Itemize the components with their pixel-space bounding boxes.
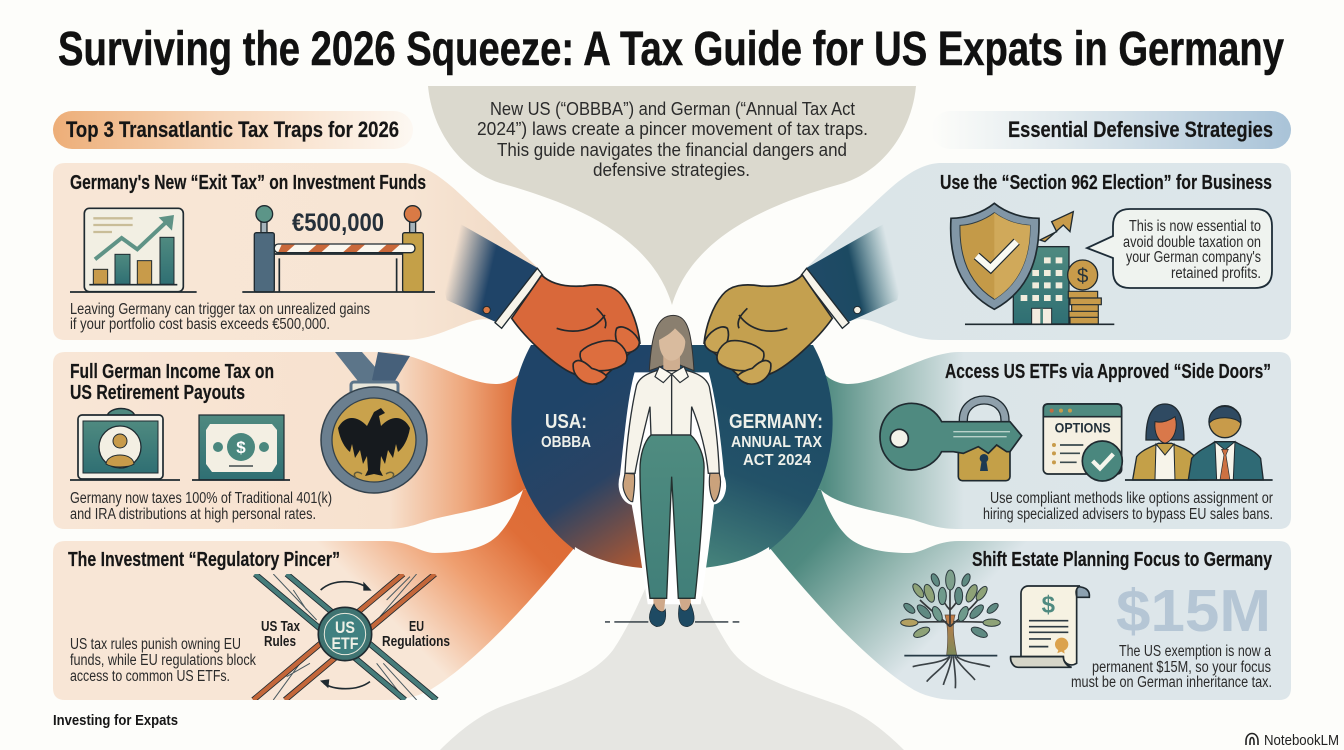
footer: NotebookLM mark: NotebookLM — [1264, 733, 1339, 749]
intro funnel with summary text: defensive strategies. — [593, 160, 750, 180]
right column heading — [931, 111, 1291, 149]
icon: will document scroll: $ — [1042, 592, 1055, 619]
callout bubble: your German company's — [1126, 249, 1261, 266]
diagram: crossed pincer beams around US ETF: EU — [409, 619, 424, 635]
panel: estate planning: permanent $15M, so your focus — [1092, 659, 1271, 676]
icon: growth chart — [70, 208, 197, 292]
panel: side doors: Use compliant methods like options assignment or — [990, 490, 1273, 507]
panel: estate planning: Shift Estate Planning Focus to Germany — [972, 549, 1273, 571]
panel: estate planning: must be on German inheritance tax. — [1071, 674, 1272, 691]
pincer circle: Germany: ANNUAL TAX — [731, 434, 822, 451]
pincer circle: USA: OBBBA — [541, 434, 591, 451]
panel: estate planning — [744, 480, 1291, 700]
footer: source label: Investing for Expats — [53, 712, 178, 729]
icon: dollar banknote: $ — [236, 438, 246, 457]
panel: side doors: hiring specialized advisers to bypass EU sales bans. — [983, 506, 1273, 523]
callout bubble: avoid double taxation on — [1123, 234, 1261, 251]
pincer circle: Germany: ACT 2024 — [743, 452, 811, 469]
left column heading — [53, 111, 413, 149]
icon: key and padlock — [880, 400, 1022, 481]
icon: shield, building and coins — [951, 203, 1114, 324]
intro funnel with summary text: New US (“OBBBA”) and German (“Annual Tax Act — [490, 99, 855, 119]
panel: retirement payouts: and IRA distributions at high personal rates. — [70, 506, 316, 523]
barrier amount: €500,000 — [292, 209, 384, 237]
intro funnel with summary text: This guide navigates the financial dangers and — [497, 140, 847, 160]
icon: €500,000 barrier — [242, 206, 435, 292]
big $15M figure: $15M — [1116, 578, 1271, 644]
panel: retirement payouts: Germany now taxes 100% of Traditional 401(k) — [70, 490, 332, 507]
diagram: crossed pincer beams around US ETF: Regulations — [382, 634, 450, 650]
callout bubble: This is now essential to — [1129, 218, 1261, 235]
left column heading: Top 3 Transatlantic Tax Traps for 2026 — [66, 117, 399, 142]
panel: regulatory pincer — [53, 480, 600, 700]
icon: options checklist — [1043, 404, 1122, 481]
callout bubble: retained profits. — [1171, 265, 1261, 282]
figure: woman between the fists — [605, 315, 739, 627]
panel: exit tax: if your portfolio cost basis exceeds €500,000. — [70, 316, 330, 333]
pincer circle: Germany: GERMANY: — [729, 411, 823, 433]
icon: dollar banknote — [192, 415, 290, 480]
icon: two advisers — [1125, 404, 1273, 480]
diagram: crossed pincer beams around US ETF: US Tax — [261, 619, 300, 635]
callout bubble — [1087, 209, 1272, 288]
panel: retirement payouts: Full German Income Tax on — [70, 361, 274, 383]
panel: retirement payouts: US Retirement Payouts — [70, 382, 245, 404]
diagram: crossed pincer beams around US ETF: US — [335, 618, 355, 637]
panel: exit tax: Germany's New “Exit Tax” on Investment Funds — [70, 172, 426, 194]
icon: retiree profile card — [70, 408, 180, 480]
right column heading: Essential Defensive Strategies — [1008, 117, 1273, 142]
panel: section 962 election — [806, 163, 1291, 340]
pincer circle: USA: USA: — [545, 411, 587, 433]
panel: regulatory pincer: funds, while EU regulations block — [70, 652, 256, 669]
icon: German eagle medal — [321, 352, 427, 493]
panel: exit tax — [53, 163, 538, 340]
icon: family tree — [901, 570, 1000, 688]
diagram: crossed pincer beams around US ETF — [253, 574, 450, 700]
diagram: crossed pincer beams around US ETF: Rules — [264, 634, 296, 650]
panel: side doors — [784, 345, 1291, 529]
intro funnel with summary text: 2024”) laws create a pincer movement of tax traps. — [477, 119, 868, 139]
panel: exit tax: Leaving Germany can trigger tax on unrealized gains — [70, 301, 370, 318]
pincer circle: Germany — [672, 345, 833, 583]
panel: regulatory pincer: The Investment “Regulatory Pincer” — [68, 549, 340, 571]
icon: options checklist: OPTIONS — [1055, 420, 1111, 435]
panel: regulatory pincer: access to common US ETFs. — [70, 668, 230, 685]
panel: retirement payouts — [53, 345, 560, 529]
hand: Germany fist — [704, 220, 907, 384]
bottom grey pedestal — [440, 565, 904, 750]
pincer circle: USA — [511, 345, 672, 583]
panel: regulatory pincer: US tax rules punish owning EU — [70, 636, 241, 653]
hand: USA fist — [437, 220, 640, 384]
intro funnel with summary text — [428, 86, 916, 305]
icon: shield, building and coins: $ — [1077, 265, 1089, 288]
panel: estate planning: The US exemption is now a — [1119, 643, 1271, 660]
diagram: crossed pincer beams around US ETF: ETF — [332, 634, 358, 653]
icon: will document scroll — [1011, 586, 1089, 667]
